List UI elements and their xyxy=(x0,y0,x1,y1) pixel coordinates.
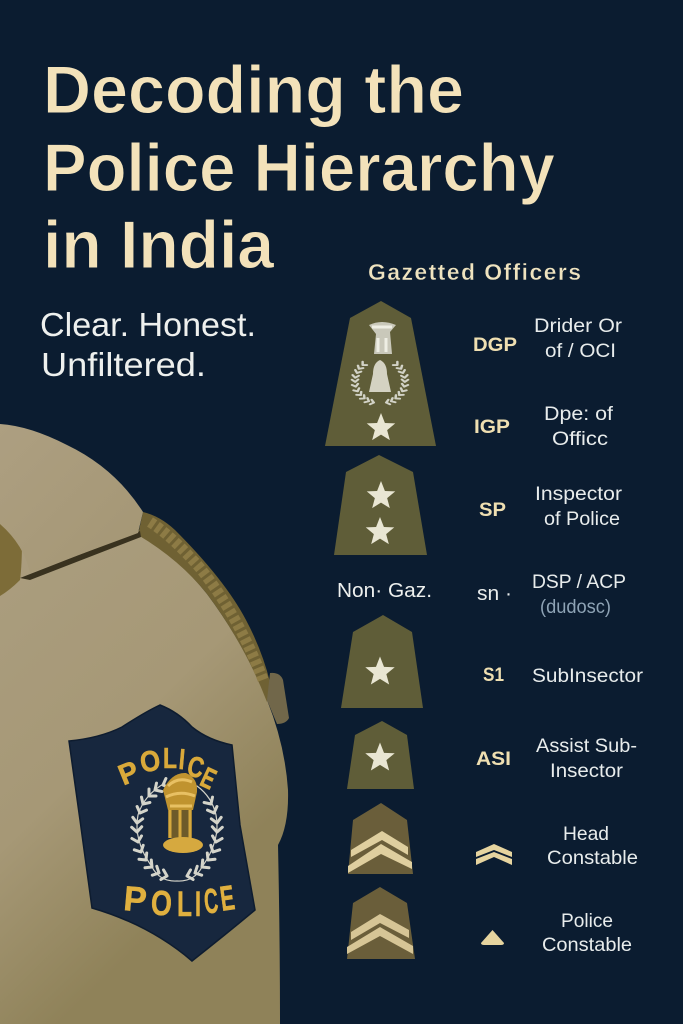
title: in India xyxy=(43,207,275,283)
row: DGP xyxy=(473,315,623,362)
subtitle xyxy=(40,306,256,383)
row: ASI xyxy=(476,735,637,782)
subtitle: Clear. Honest. xyxy=(40,306,256,343)
icon: triangle xyxy=(481,930,504,945)
badge bottom text POLICE: O xyxy=(150,884,173,924)
row: SP xyxy=(479,483,623,530)
insignia: DGP and IGP shoulder board xyxy=(325,301,436,446)
badge top text POLICE: L xyxy=(163,743,177,775)
badge top text POLICE: E xyxy=(195,762,221,796)
title: Decoding the xyxy=(43,52,464,128)
row: police constable: Constable xyxy=(542,934,632,956)
row: SI: SubInsector xyxy=(532,665,644,687)
row: ASI: Insector xyxy=(550,760,624,782)
badge patch xyxy=(69,705,255,961)
row: DGP: Drider Or xyxy=(534,315,623,337)
row: police constable xyxy=(481,910,632,956)
row: head constable: Head xyxy=(563,823,609,845)
badge bottom text POLICE: I xyxy=(195,885,201,924)
row: SP: SP xyxy=(479,500,506,521)
icon: double chevron xyxy=(476,844,512,865)
row: IGP: Dpe: of xyxy=(544,403,614,425)
badge wreath xyxy=(132,778,222,881)
badge bottom text POLICE: C xyxy=(202,881,220,922)
insignia: SP shoulder board xyxy=(334,455,427,555)
shoulder badge xyxy=(69,705,255,961)
row: DSP / ACP xyxy=(477,571,626,618)
badge top text POLICE xyxy=(114,743,221,796)
row: head constable xyxy=(476,823,638,869)
badge bottom text POLICE xyxy=(122,878,237,924)
shoulder rope cord xyxy=(138,512,270,702)
row: DSP / ACP: sn · xyxy=(477,583,512,605)
epaulette flap xyxy=(0,424,143,573)
row: IGP: IGP xyxy=(474,417,510,438)
emblem: wreath and bell xyxy=(352,360,408,404)
insignia: SI shoulder board xyxy=(341,615,423,708)
badge top text POLICE: P xyxy=(114,755,144,792)
label: non-gazetted: Non· Gaz. xyxy=(337,580,432,602)
badge top text POLICE: C xyxy=(184,750,207,785)
row: SP: Inspector xyxy=(535,483,623,505)
insignia: ASI shoulder board xyxy=(347,721,414,789)
row: IGP: Officc xyxy=(552,428,608,450)
row: IGP xyxy=(474,403,614,450)
star xyxy=(367,413,395,440)
insignia: police constable shoulder board xyxy=(347,887,415,959)
row: DGP: DGP xyxy=(473,335,517,356)
badge bottom text POLICE: L xyxy=(177,885,192,924)
title xyxy=(43,52,555,283)
insignia: head constable shoulder board xyxy=(348,803,413,874)
badge bottom text POLICE: E xyxy=(218,878,237,919)
sleeve fabric xyxy=(0,510,288,1024)
row: ASI: ASI xyxy=(476,749,511,770)
badge top text POLICE: I xyxy=(178,744,186,776)
row: DSP / ACP: (dudosc) xyxy=(540,597,611,618)
epaulette flap shadow xyxy=(20,531,141,580)
row: SI: S1 xyxy=(483,665,504,686)
row: ASI: Assist Sub- xyxy=(536,735,637,757)
emblem: national lion capital xyxy=(369,322,396,354)
row: police constable: Police xyxy=(561,910,613,932)
badge lion capital emblem xyxy=(163,773,203,853)
shoulder strap button tab xyxy=(267,673,289,724)
row: DGP: of / OCI xyxy=(545,340,616,362)
row: SI xyxy=(483,665,644,687)
row: SP: of Police xyxy=(544,508,620,530)
subtitle: Unfiltered. xyxy=(41,346,206,383)
left rope end xyxy=(0,520,22,596)
title: Police Hierarchy xyxy=(43,130,555,206)
uniform shoulder photo illustration xyxy=(0,424,289,1024)
shoulder rope strands xyxy=(150,522,264,682)
heading: gazetted officers: Gazetted Officers xyxy=(368,259,581,285)
row: DSP / ACP: DSP / ACP xyxy=(532,571,626,593)
badge bottom text POLICE: P xyxy=(122,879,148,920)
row: head constable: Constable xyxy=(547,847,638,869)
badge top text POLICE: O xyxy=(138,744,163,779)
